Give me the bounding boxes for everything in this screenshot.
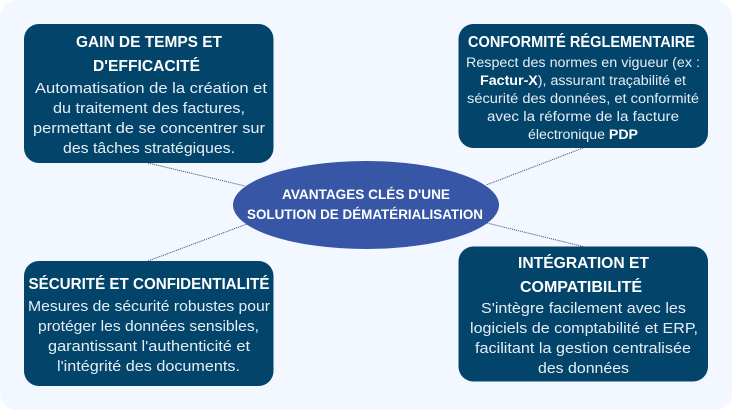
text: sécurité: Mesures de sécurité robustes pour xyxy=(28,299,270,315)
text: conformité: sécurité des données, et conformité xyxy=(467,91,699,106)
central heading xyxy=(247,187,483,222)
connector: top left box to centre xyxy=(148,163,245,186)
connector: bottom left box to centre xyxy=(148,224,247,261)
heading: gain de temps: GAIN DE TEMPS ET xyxy=(76,34,223,51)
heading: intégration xyxy=(518,255,650,296)
text: sécurité: l'intégrité des documents. xyxy=(57,359,240,375)
heading: gain de temps: D'EFFICACITÉ xyxy=(93,58,200,75)
text: intégration: des données xyxy=(538,361,629,377)
text: sécurité xyxy=(28,299,270,375)
central heading: AVANTAGES CLÉS D'UNE xyxy=(282,187,450,202)
text: gain de temps xyxy=(33,81,267,157)
central ellipse xyxy=(233,161,499,249)
text: intégration: logiciels de comptabilité et ERP, xyxy=(470,321,698,337)
text: conformité: électronique PDP xyxy=(528,127,638,142)
text: conformité: Respect des normes en vigueur (ex : xyxy=(466,55,700,70)
text: gain de temps: des tâches stratégiques. xyxy=(63,141,235,157)
text: gain de temps: Automatisation de la création et xyxy=(35,81,267,97)
heading: conformité: CONFORMITÉ RÉGLEMENTAIRE xyxy=(468,34,695,51)
panel: conformité réglementaire xyxy=(458,24,708,148)
central heading: SOLUTION DE DÉMATÉRIALISATION xyxy=(247,207,483,222)
text: intégration: S'intègre facilement avec les xyxy=(481,301,686,317)
connector: bottom right box to centre xyxy=(487,223,583,246)
panel: intégration et compatibilité xyxy=(458,246,708,382)
panel: gain de temps et d'efficacité xyxy=(24,24,274,163)
text: sécurité: protéger les données sensibles, xyxy=(38,319,259,335)
text: conformité xyxy=(466,55,700,142)
heading: intégration: INTÉGRATION ET xyxy=(518,255,650,272)
text: sécurité: garantissant l'authenticité et xyxy=(48,339,250,355)
text: gain de temps: du traitement des factures, xyxy=(53,101,245,117)
heading: intégration: COMPATIBILITÉ xyxy=(520,279,642,296)
text: conformité: avec la réforme de la facture xyxy=(487,109,679,124)
heading: gain de temps xyxy=(76,34,223,75)
panel: sécurité et confidentialité xyxy=(24,261,274,386)
text: intégration xyxy=(470,301,698,377)
text: gain de temps: permettant de se concentrer sur xyxy=(33,121,265,137)
text: conformité: Factur-X), assurant traçabilité et xyxy=(480,73,686,88)
connector: top right box to centre xyxy=(486,148,583,185)
text: intégration: facilitant la gestion centralisée xyxy=(475,341,691,357)
heading: sécurité: SÉCURITÉ ET CONFIDENTIALITÉ xyxy=(28,276,270,293)
